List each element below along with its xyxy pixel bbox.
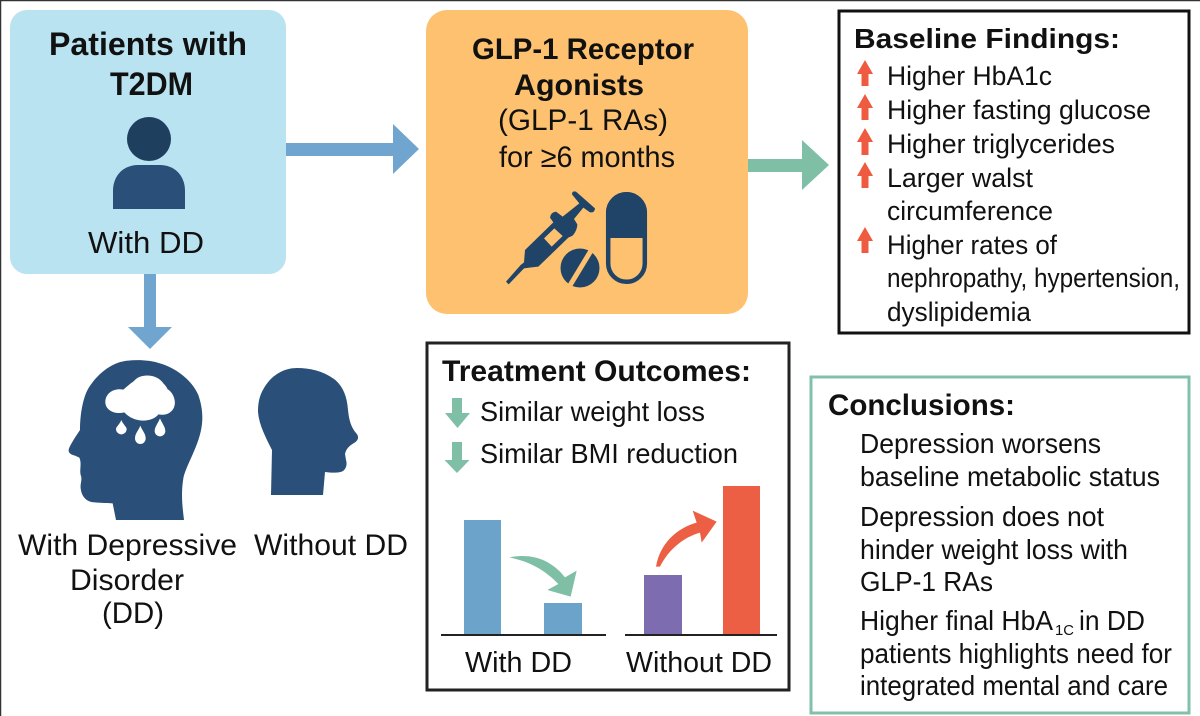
text: duration xyxy=(498,104,675,174)
icon: tablet xyxy=(560,248,600,288)
list: baseline findings text xyxy=(887,61,1180,327)
arrow: patients to GLP-1 RAs xyxy=(286,124,419,174)
icon: syringe xyxy=(506,191,595,284)
icon: person xyxy=(113,117,185,209)
label: with depressive disorder: Disorder xyxy=(70,564,184,597)
list: baseline findings text: circumference xyxy=(887,196,1053,226)
icon: head without cloud xyxy=(258,368,358,495)
label: without DD: Without DD xyxy=(254,529,408,562)
icon: head with rain cloud xyxy=(69,360,202,520)
heading: GLP-1 receptor agonists: GLP-1 Receptor xyxy=(472,33,695,66)
text: conclusion 3 xyxy=(860,605,1172,701)
icons: green down arrows xyxy=(444,398,470,473)
text: conclusion 3: patients highlights need for xyxy=(860,638,1172,669)
icons: red up arrows xyxy=(857,60,873,253)
bar chart: without DD xyxy=(625,486,777,679)
panel: conclusions xyxy=(811,377,1189,713)
text: conclusion 3: in DD xyxy=(1079,605,1145,636)
label: with depressive disorder xyxy=(18,529,237,630)
list: baseline findings text: Higher fasting glucose xyxy=(887,95,1151,125)
text: conclusion 3: Higher final HbA xyxy=(860,605,1054,636)
text: conclusion 1 xyxy=(860,428,1160,492)
text: conclusion 2: GLP-1 RAs xyxy=(860,566,993,597)
heading: baseline findings: Baseline Findings: xyxy=(854,23,1120,54)
list: baseline findings text: Larger walst xyxy=(887,163,1033,193)
text: conclusion 1: baseline metabolic status xyxy=(860,461,1160,492)
panel: GLP-1 receptor agonists xyxy=(426,10,748,314)
bar chart: with DD xyxy=(441,520,606,679)
text: duration: for ≥6 months xyxy=(499,141,675,174)
text: conclusion 2 xyxy=(860,501,1128,597)
list: baseline findings text: Higher triglycerides xyxy=(887,129,1115,159)
list: outcome items xyxy=(480,396,738,469)
label: with depressive disorder: (DD) xyxy=(102,597,164,630)
heading: patients with T2DM xyxy=(49,26,247,102)
heading: GLP-1 receptor agonists xyxy=(472,33,695,102)
label: with depressive disorder: With Depressive xyxy=(18,529,237,562)
heading: patients with T2DM: Patients with xyxy=(49,26,247,62)
text: conclusion 1: Depression worsens xyxy=(860,428,1101,459)
heading: treatment outcomes: Treatment Outcomes: xyxy=(442,355,751,388)
list: outcome items: Similar weight loss xyxy=(480,396,705,427)
panel: treatment outcomes xyxy=(427,343,789,690)
arrow: GLP-1 RAs to baseline findings xyxy=(748,140,829,190)
icon: rain cloud xyxy=(105,376,175,444)
icon: capsule xyxy=(606,192,647,282)
list: baseline findings text: Higher HbA1c xyxy=(887,61,1052,91)
heading: GLP-1 receptor agonists: Agonists xyxy=(514,69,644,102)
panel: baseline findings xyxy=(839,11,1189,333)
heading: conclusions: Conclusions: xyxy=(828,389,1015,422)
list: baseline findings text: dyslipidemia xyxy=(887,297,1032,327)
arrow: green decrease xyxy=(509,556,577,597)
text: conclusion 3: integrated mental and care xyxy=(860,670,1168,701)
text: conclusion 3: 1C xyxy=(1055,622,1074,639)
label: with DD: With DD xyxy=(465,647,572,679)
arrow: patients down to groups xyxy=(128,274,172,349)
text: conclusion 2: hinder weight loss with xyxy=(860,534,1128,565)
panel: patients with T2DM xyxy=(10,10,286,274)
label: with DD: With DD xyxy=(88,225,204,260)
heading: patients with T2DM: T2DM xyxy=(110,66,193,102)
list: outcome items: Similar BMI reduction xyxy=(480,438,738,469)
label: without DD: Without DD xyxy=(626,647,772,679)
text: duration: (GLP-1 RAs) xyxy=(498,104,668,137)
text: conclusion 2: Depression does not xyxy=(860,501,1104,532)
list: baseline findings text: Higher rates of xyxy=(887,230,1057,260)
arrow: red increase xyxy=(656,511,717,567)
